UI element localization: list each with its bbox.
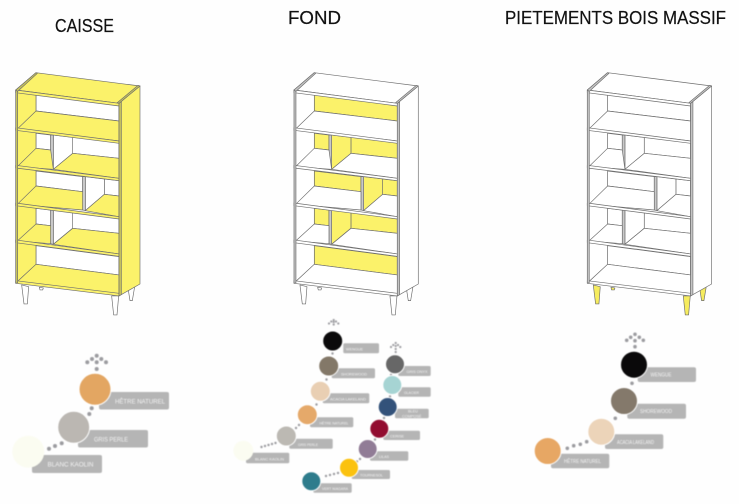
swatch group: piètements [534,332,696,468]
swatch: acacia lakeland [588,418,663,449]
swatch: blanc kaolin [233,441,289,463]
swatch: hêtre naturel [297,405,353,427]
swatch: wengué [620,351,696,382]
swatch: lilas [358,440,408,461]
swatch: bleu composé: BLEU [408,410,418,414]
bookcase: legs highlighted [587,73,712,315]
title: piètements bois massif: PIETEMENTS BOIS MASSIF [505,8,726,28]
bookcase: fond highlighted [294,73,418,315]
swatch: gris onyx [386,355,431,376]
swatch: gris perle: GRIS PERLE [298,442,318,447]
swatch: blanc kaolin: BLANC KAOLIN [48,462,94,468]
swatch: gris perle: GRIS PERLE [94,436,129,444]
swatch: lilas: LILAS [379,454,389,459]
swatch: vert niagara: VERT NIAGARA [322,486,348,491]
swatch: wengué: WENGUE [650,372,672,378]
swatch group: fond [233,319,431,493]
swatch: gris perle [58,411,148,448]
swatch: bleu composé: COMPOSÉ [402,413,422,418]
title: caisse: CAISSE [55,16,114,36]
swatch: tournesol: TOURNESOL [360,473,384,478]
swatch: hêtre naturel [79,373,169,410]
swatch: acacia lakeland: ACACIA LAKELAND [617,440,654,446]
arrow: right column [390,342,401,353]
swatch: blanc kaolin [12,436,102,473]
connector dots [47,406,94,451]
bookcase: caisse highlighted [16,73,140,315]
swatch: glacier [383,376,431,397]
swatch: acacia lakeland [310,381,369,403]
arrow: more finishes [85,354,108,371]
swatch: wengué [323,331,379,353]
swatch: acacia lakeland: ACACIA LAKELAND [330,396,366,402]
swatch: glacier: GLACIER [404,390,419,395]
swatch: shorewood [319,356,375,378]
swatch: cerise: CERISE [390,434,404,438]
swatch: bleu composé [378,398,429,418]
swatch group: caisse [12,354,169,473]
swatch: tournesol [340,458,390,479]
swatch: shorewood: SHOREWOOD [640,409,672,415]
swatch: hêtre naturel: HÊTRE NATUREL [564,457,601,465]
swatch: wengué: WENGUE [346,346,363,352]
swatch: vert niagara [302,472,352,493]
connector dots [566,382,634,450]
swatch: hêtre naturel: HÊTRE NATUREL [320,420,349,426]
swatch: gris onyx: GRIS ONYX [406,369,428,374]
swatch: cerise [370,419,420,440]
arrow: left column [328,319,339,326]
swatch: shorewood: SHOREWOOD [341,372,367,376]
connector dots [260,352,392,477]
swatch: hêtre naturel: HÊTRE NATUREL [115,396,165,406]
swatch: shorewood [610,388,686,419]
title: fond: FOND [288,8,341,28]
swatch: hêtre naturel [534,438,609,468]
swatch: blanc kaolin: BLANC KAOLIN [255,456,284,462]
arrow: more finishes [625,332,645,349]
swatch: gris perle [276,426,333,449]
